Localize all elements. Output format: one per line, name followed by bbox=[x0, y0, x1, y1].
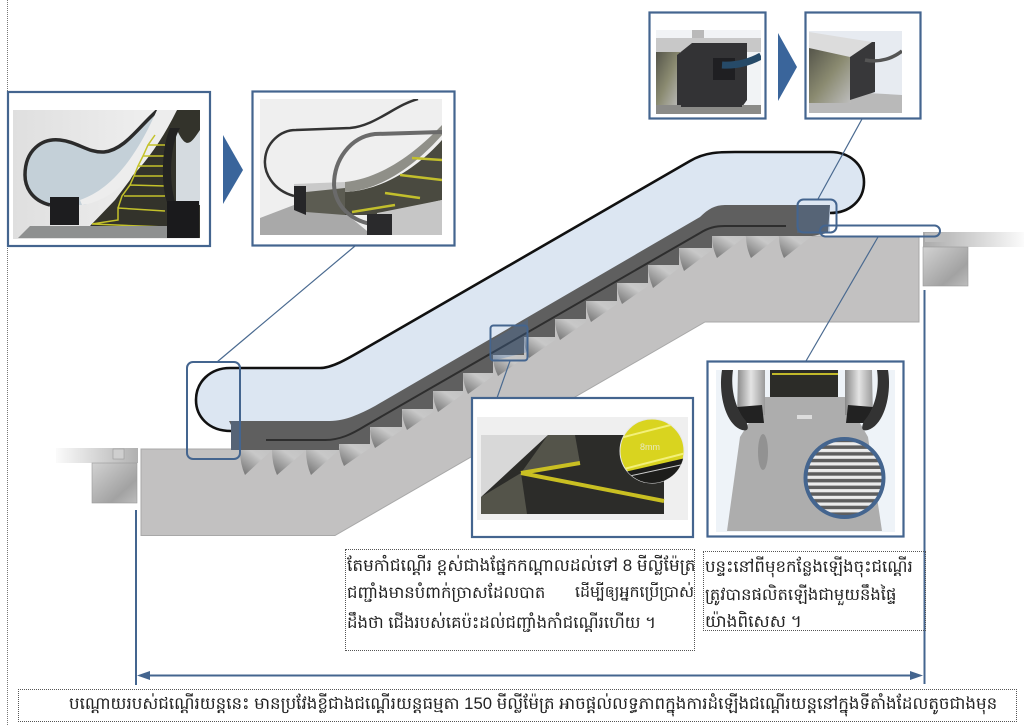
step wedges bbox=[240, 236, 812, 475]
panel: comb plate photo bbox=[708, 362, 904, 536]
arrow: upper photos bbox=[778, 33, 797, 101]
text box: demarcation note: ដឹងថា ជើងរបស់គេប៉ះដល់ជញ្ជាំងកាំជណ្តើរហើយ ។ bbox=[347, 614, 656, 632]
panel: old inlet cover photo bbox=[650, 12, 766, 118]
text box: demarcation note: ជញ្ជាំងមានបំពាក់ច្រាសដែលបាត bbox=[347, 584, 545, 602]
dark skirt band bbox=[229, 205, 830, 450]
page left dotted edge bbox=[6, 0, 8, 725]
dimension lines and arrow bbox=[136, 290, 924, 685]
panel: new handrail end photo bbox=[252, 92, 454, 246]
skirt inner line bbox=[266, 226, 786, 440]
magnifier: 8 mm yellow edge: 8mm bbox=[640, 442, 660, 452]
upper floor landing bbox=[923, 232, 1024, 286]
truss body bbox=[141, 236, 919, 536]
panel: new inlet cover photo bbox=[806, 12, 920, 118]
lower floor landing bbox=[56, 448, 138, 503]
balustrade glass and handrail bbox=[196, 152, 864, 431]
text box: demarcation note: ដើម្បីឲ្យអ្នកប្រើប្រាស់ bbox=[575, 584, 694, 601]
blue highlight tints bbox=[231, 205, 830, 450]
text box: comb plate note: យ៉ាងពិសេស ។ bbox=[705, 612, 802, 631]
magnifier: comb plate grooves bbox=[806, 439, 884, 517]
highlight: lower handrail end bbox=[187, 362, 240, 459]
magnifier: 8 mm yellow edge bbox=[620, 420, 684, 484]
panel: old handrail end photo bbox=[8, 92, 210, 246]
text box: overall length note: បណ្តោយរបស់ជណ្តើរយន្តនេះ មានប្រវែងខ្លីជាងជណ្តើរយន្តធម្មតា 150 មីល្លីម៉ែត្រ អាចផ្តល់លទ្ធភាពក្នុងការដំឡើងជណ្តើរយន្តនៅក្នុងទីតាំងដែលតូចជាងមុន bbox=[69, 694, 997, 713]
text box: comb plate note: បន្ទះនៅពីមុខកន្លែងឡើងចុះជណ្តើរ bbox=[705, 557, 913, 576]
text box: comb plate note: ត្រូវបានផលិតឡើងជាមួយនឹងផ្ទៃ bbox=[705, 586, 896, 604]
panel: step demarcation photo bbox=[472, 398, 693, 537]
arrow: lower photos bbox=[223, 135, 243, 204]
highlight: comb plate bbox=[820, 226, 940, 236]
connector lines bbox=[217, 119, 878, 398]
text box: demarcation note bbox=[345, 549, 695, 651]
text box: comb plate note bbox=[703, 551, 926, 631]
text box: overall length note bbox=[18, 689, 1017, 722]
text box: demarcation note: តែមកាំជណ្តើរ ខ្ពស់ជាងផ្នែកកណ្តាលដល់ទៅ 8 មីល្លីម៉ែត្រ bbox=[347, 556, 696, 575]
highlight: step edge bbox=[490, 326, 528, 360]
highlight: upper handrail end bbox=[798, 200, 836, 232]
